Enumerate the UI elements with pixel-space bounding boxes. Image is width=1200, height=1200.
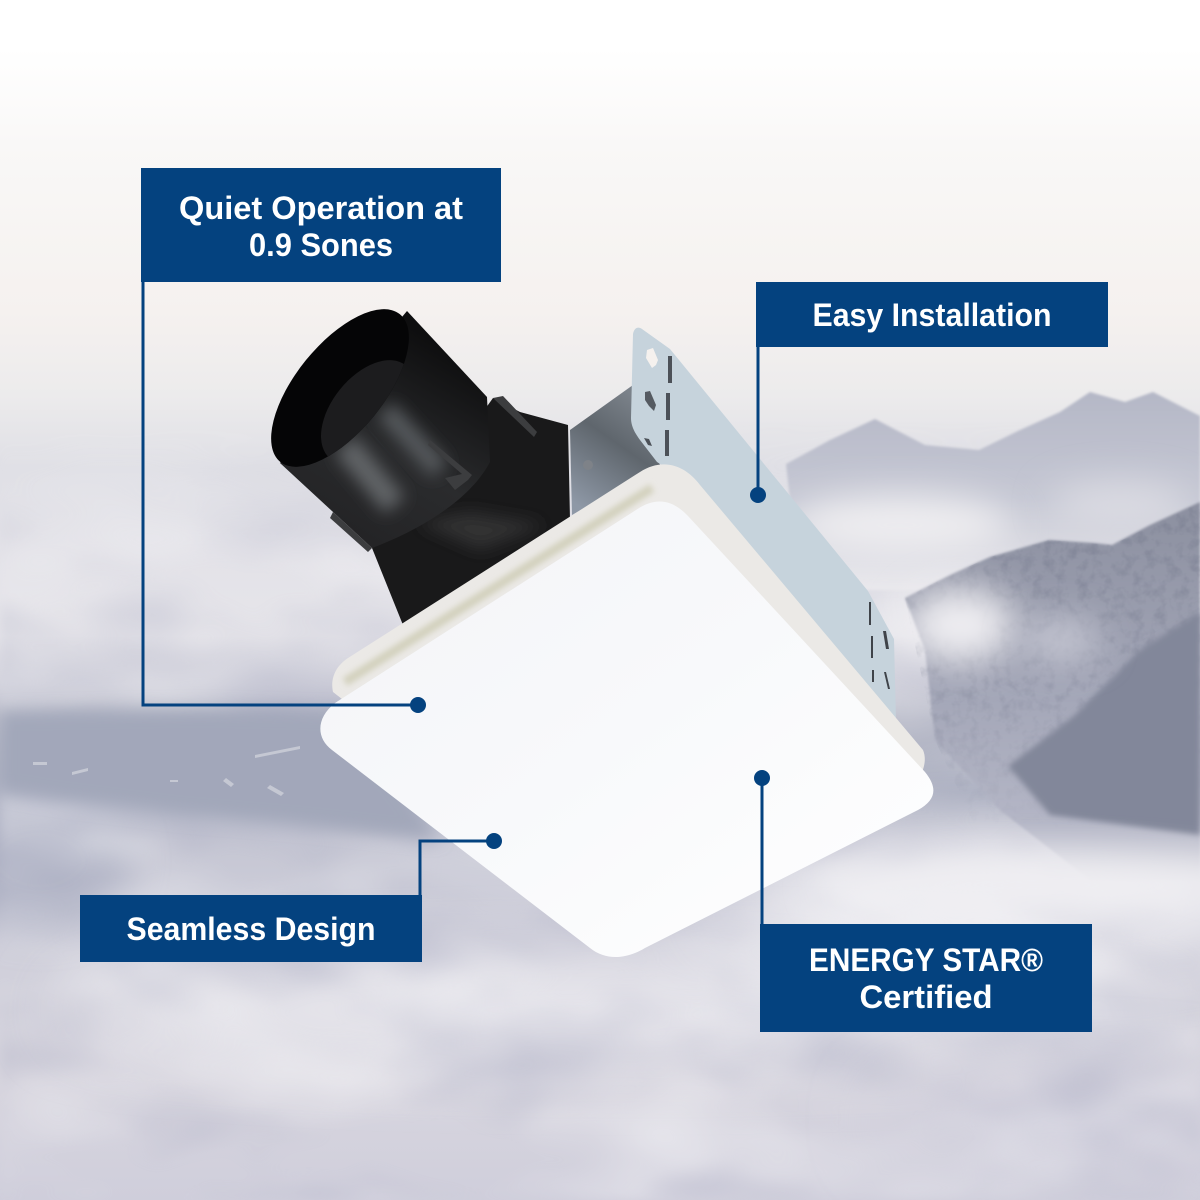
white grille plate xyxy=(320,502,933,957)
rim xyxy=(332,464,930,900)
background: far mountains xyxy=(786,392,1200,590)
callout: easy installation xyxy=(750,282,1108,503)
duct opening xyxy=(246,286,434,490)
background: near mountains xyxy=(880,502,1200,910)
product: bath fan xyxy=(246,286,933,957)
callout: seamless design xyxy=(80,833,502,962)
callout: quiet operation: 0.9 Sones xyxy=(249,227,393,263)
callout: seamless design: Seamless Design xyxy=(126,911,376,947)
black duct cylinder xyxy=(280,311,490,548)
callout: quiet operation xyxy=(141,168,501,713)
callout: quiet operation: Quiet Operation at xyxy=(179,190,463,226)
callout: energy star: ENERGY STAR® xyxy=(809,942,1043,978)
callout: energy star xyxy=(754,770,1092,1032)
screw xyxy=(583,460,593,470)
duct highlight xyxy=(345,410,440,505)
bracket holes xyxy=(644,348,890,689)
metal housing side xyxy=(570,385,660,515)
background: lower clouds xyxy=(0,513,1144,1198)
metal mounting bracket xyxy=(631,328,896,720)
callout: easy installation: Easy Installation xyxy=(812,297,1052,333)
black duct funnel xyxy=(372,398,570,630)
callout: energy star: Certified xyxy=(860,979,992,1015)
background: distant valley xyxy=(0,708,440,840)
duct tabs xyxy=(330,396,537,552)
